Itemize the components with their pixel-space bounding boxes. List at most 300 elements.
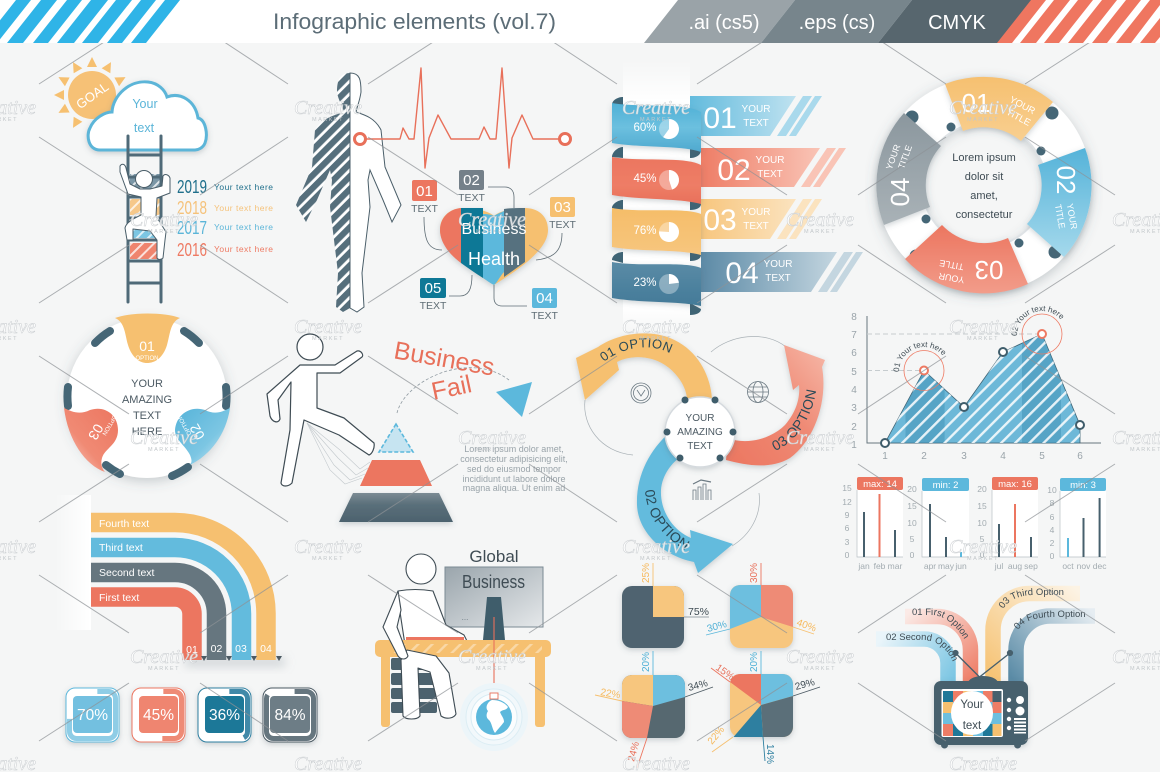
arrow 03: 03 OPTION xyxy=(772,390,816,450)
highlight circles xyxy=(904,314,1062,390)
tile 36% xyxy=(198,688,251,742)
panel: business health xyxy=(296,68,576,322)
format tabs: .eps (cs) xyxy=(799,12,875,34)
panel: line chart xyxy=(851,306,1101,462)
format tabs: .ai (cs5) xyxy=(688,12,760,34)
timeline years: 2017 xyxy=(177,218,207,238)
title: Infographic elements (vol.7) xyxy=(273,9,556,34)
tile 84%: 84% xyxy=(274,707,306,724)
pie five slices xyxy=(706,651,820,764)
figure upper xyxy=(398,554,469,645)
lorem text xyxy=(460,444,568,493)
watermark logos: MARKET xyxy=(640,117,672,123)
option 01: OPTION xyxy=(135,356,159,362)
band labels: Second text xyxy=(99,567,155,579)
pie 20/34/24/22: 22% xyxy=(599,687,621,701)
x axis labels: 5 xyxy=(1039,451,1045,462)
label 02 xyxy=(458,170,485,204)
label 03: 03 xyxy=(554,199,571,216)
chart q4: 2 xyxy=(1050,538,1055,548)
tv controls xyxy=(1007,696,1026,734)
watermark logos: MARKET xyxy=(804,229,836,235)
panel: rainbow bands xyxy=(55,495,285,666)
watermark logos: Creative xyxy=(949,536,1017,558)
pie five slices: 15% xyxy=(713,662,736,683)
heart chart xyxy=(440,208,548,285)
timeline years: 2016 xyxy=(177,240,207,260)
pie five slices: 14% xyxy=(764,744,775,764)
label 03: TEXT xyxy=(549,219,576,231)
connector arrows xyxy=(424,187,562,306)
antenna xyxy=(953,651,1012,677)
arrow 02 xyxy=(634,436,733,575)
watermark logos: Creative xyxy=(949,316,1017,338)
keyboard xyxy=(406,637,464,642)
option 03: 03 xyxy=(85,421,107,443)
pie 30/40/30: 30% xyxy=(749,563,760,583)
kicking figure xyxy=(267,334,374,486)
icon: globe with rings xyxy=(460,683,528,751)
watermark logos: MARKET xyxy=(967,336,999,342)
label 02: 02 xyxy=(463,172,480,189)
chart q1: feb xyxy=(874,561,886,571)
option labels: 03 Third Option xyxy=(998,588,1064,608)
chart q2: jun xyxy=(954,561,967,571)
segment 03 xyxy=(905,225,1028,293)
watermark logos: Creative xyxy=(294,97,362,119)
icon: badge xyxy=(631,383,651,403)
lorem text: incididunt ut labore dolore xyxy=(462,474,566,484)
segment 02: TITLE xyxy=(1053,204,1067,229)
pie 75/25: 25% xyxy=(641,563,652,583)
white column xyxy=(623,60,690,335)
tips xyxy=(201,656,282,661)
timeline years: Your text here xyxy=(214,182,273,192)
chart q2: 0 xyxy=(910,550,915,560)
arrow 03 xyxy=(724,345,826,470)
segment 01 xyxy=(945,77,1053,141)
watermark logos: Creative xyxy=(786,427,854,449)
segment 01: 01 xyxy=(962,88,990,118)
white disc xyxy=(67,318,227,478)
centre text: amet, xyxy=(970,190,998,202)
reference dashes xyxy=(867,334,1042,370)
tv body xyxy=(934,676,1028,748)
x axis labels: 1 xyxy=(882,451,888,462)
timeline years: Your text here xyxy=(214,203,273,213)
option labels: 01 First Option xyxy=(912,608,968,639)
chart q1: 9 xyxy=(845,510,850,520)
segment 03: 03 xyxy=(975,255,1003,285)
x axis labels: 4 xyxy=(1000,451,1006,462)
chart q3: aug xyxy=(1008,561,1022,571)
watermark logos: Creative xyxy=(949,97,1017,119)
pie 30/40/30 xyxy=(706,563,818,648)
red stripes xyxy=(997,0,1160,43)
pie 20/34/24/22 xyxy=(595,651,713,768)
arrow 01 xyxy=(574,333,714,402)
y axis labels: 4 xyxy=(851,385,857,396)
chart q3: 5 xyxy=(980,534,985,544)
centre text: YOUR xyxy=(131,378,163,390)
y axis labels: 8 xyxy=(851,312,857,323)
label 04 xyxy=(531,288,558,322)
curved labels: 02 Your text here xyxy=(1012,306,1064,336)
ribbon 76% xyxy=(612,200,701,261)
band numbers: 04 xyxy=(260,643,272,655)
watermark logos: MARKET xyxy=(148,447,180,453)
chart q4: 8 xyxy=(1050,498,1055,508)
chart q1 xyxy=(842,477,903,571)
chart q1: jan xyxy=(857,561,870,571)
pie 20/34/24/22: 24% xyxy=(626,740,642,763)
band numbers xyxy=(186,643,272,656)
chart q1: 0 xyxy=(845,550,850,560)
watermark logos: MARKET xyxy=(148,666,180,672)
dashed arc xyxy=(397,368,509,413)
format tabs: CMYK xyxy=(928,12,987,34)
watermark logos: MARKET xyxy=(640,336,672,342)
heading: Business xyxy=(392,336,497,382)
option 02: OPTION xyxy=(177,413,193,436)
heading xyxy=(392,336,497,406)
monitor: ... xyxy=(462,613,468,622)
watermark logos: MARKET xyxy=(967,117,999,123)
chart q3: 15 xyxy=(977,501,987,511)
floor shadow xyxy=(185,658,285,666)
bar 02 xyxy=(701,148,846,187)
watermark logos: Creative xyxy=(458,209,526,231)
watermark logos: Creative xyxy=(130,427,198,449)
icon: cloud: Your xyxy=(132,97,158,111)
option labels xyxy=(886,588,1085,662)
area xyxy=(885,334,1080,443)
ribbon 60% xyxy=(612,97,701,158)
chart q2: apr xyxy=(924,561,936,571)
bar 04: 04 xyxy=(725,257,759,290)
centre text xyxy=(952,152,1016,221)
chart q3: sep xyxy=(1024,561,1038,571)
y axis labels: 7 xyxy=(851,330,857,341)
icon: cloud: text xyxy=(134,121,155,135)
option 03: OPTION xyxy=(101,413,117,436)
watermark logos: MARKET xyxy=(640,556,672,562)
data points xyxy=(881,330,1084,447)
chart q1: 3 xyxy=(845,537,850,547)
segment 04: YOUR xyxy=(884,143,902,171)
bar 01: YOUR xyxy=(742,104,770,115)
bar 04: TEXT xyxy=(765,273,791,284)
curved labels: 01 Your text here xyxy=(894,342,946,372)
panel: television options xyxy=(876,586,1095,750)
ribbon 76%: 76% xyxy=(633,225,657,237)
heartbeat line xyxy=(354,68,570,168)
panel: spiral arrows xyxy=(574,333,826,575)
tile 70%: 70% xyxy=(77,707,108,724)
thin arcs xyxy=(585,336,786,546)
centre text: TEXT xyxy=(133,410,161,422)
band labels: Third text xyxy=(99,542,143,554)
blue triangle xyxy=(496,382,532,417)
panel: business fail xyxy=(267,334,568,522)
label 03 xyxy=(549,197,576,231)
tile 45%: 45% xyxy=(143,707,174,724)
band numbers: 03 xyxy=(235,643,247,655)
option labels: 04 Fourth Option xyxy=(1014,610,1085,629)
bar 04: YOUR xyxy=(764,259,792,270)
centre circle: YOUR xyxy=(686,413,714,424)
icon: cloud xyxy=(88,82,206,150)
label 04: 04 xyxy=(536,290,553,307)
chart q4: 0 xyxy=(1050,551,1055,561)
heart chart: Health xyxy=(468,249,520,269)
chart q4: nov xyxy=(1077,561,1091,571)
bar 01: 01 xyxy=(703,102,737,135)
pie 20/34/24/22: 20% xyxy=(641,652,652,672)
option 02 xyxy=(175,408,230,465)
bar 03: 03 xyxy=(703,204,737,237)
chart q2: may xyxy=(938,561,955,571)
dark knobs xyxy=(67,331,227,476)
label 01 xyxy=(411,180,438,215)
centre text xyxy=(122,378,172,438)
panel: percentage tiles xyxy=(66,688,317,742)
watermark logos: Creative xyxy=(622,536,690,558)
chart q4: oct xyxy=(1062,561,1074,571)
label 05: TEXT xyxy=(420,300,447,312)
heart chart: Business xyxy=(462,221,526,238)
curved labels xyxy=(894,306,1064,372)
icon: sun: GOAL xyxy=(73,79,111,112)
segment 03: YOUR xyxy=(937,271,965,285)
watermark logos: MARKET xyxy=(312,556,344,562)
bar 02: 02 xyxy=(717,154,751,187)
y axis labels: 5 xyxy=(851,367,857,378)
icon: sun xyxy=(54,57,128,130)
chart q2: 20 xyxy=(907,484,917,494)
panel: square pie charts xyxy=(595,563,820,768)
watermark logos: Creative xyxy=(786,646,854,668)
chart q3: 20 xyxy=(977,484,987,494)
option labels: 02 Second Option xyxy=(886,634,957,662)
chart q2 xyxy=(907,478,969,571)
bar 02: TEXT xyxy=(757,169,783,180)
watermark logos: MARKET xyxy=(476,666,508,672)
desk xyxy=(375,640,551,727)
timeline years: 2018 xyxy=(177,198,207,218)
x axis labels: 6 xyxy=(1077,451,1083,462)
blue stripes xyxy=(0,0,180,43)
heading: Global xyxy=(469,547,519,566)
y axis labels: 3 xyxy=(851,403,857,414)
ladder with coloured steps xyxy=(128,136,161,302)
chart q4: dec xyxy=(1093,561,1107,571)
chart q3: 10 xyxy=(977,518,987,528)
segment 04: TITLE xyxy=(896,144,914,170)
watermark logos: Creative xyxy=(458,646,526,668)
watermark logos: Creative xyxy=(294,536,362,558)
figure lower xyxy=(383,591,456,719)
watermark logos: Creative xyxy=(130,646,198,668)
pie five slices: 22% xyxy=(706,724,727,747)
icon: globe xyxy=(748,382,768,402)
bar 03: YOUR xyxy=(742,207,770,218)
panel: goal ladder xyxy=(54,57,273,302)
pie 30/40/30: 30% xyxy=(706,619,728,635)
chart q1: 6 xyxy=(845,523,850,533)
option 02: 02 xyxy=(186,421,208,443)
option bands xyxy=(876,594,1095,683)
watermark logos: Creative xyxy=(458,427,526,449)
chart q2: 5 xyxy=(910,534,915,544)
watermark logos: MARKET xyxy=(967,556,999,562)
chart q4 xyxy=(1047,478,1107,571)
arrow 01: 01 OPTION xyxy=(600,338,673,360)
label 04: TEXT xyxy=(531,310,558,322)
y axis labels: 6 xyxy=(851,348,857,359)
chart q2: 10 xyxy=(907,518,917,528)
arrow 02: 02 OPTION xyxy=(645,490,690,550)
chart q3: max: 16 xyxy=(998,479,1032,490)
watermark logos: MARKET xyxy=(804,666,836,672)
band labels: Fourth text xyxy=(99,518,149,530)
option 01: 01 xyxy=(139,338,155,354)
y axis labels: 1 xyxy=(851,440,857,451)
watermark logos: Creative xyxy=(130,209,198,231)
segment 01: TITLE xyxy=(1004,107,1032,129)
chart q4: min: 3 xyxy=(1070,480,1096,491)
segment 04: 04 xyxy=(885,178,915,206)
centre text: HERE xyxy=(132,426,162,438)
centre circle: AMAZING xyxy=(677,427,723,438)
pie 30/40/30: 40% xyxy=(795,617,818,635)
watermark logos: MARKET xyxy=(312,336,344,342)
dark knobs xyxy=(906,106,1062,262)
watermark logos: MARKET xyxy=(148,229,180,235)
ribbon 23% xyxy=(612,252,701,315)
bar 01: TEXT xyxy=(743,118,769,129)
ghost leg fan xyxy=(307,423,370,484)
climbing figure xyxy=(120,164,170,260)
lorem text: sed do eiusmod tempor xyxy=(467,464,561,474)
segment 02: YOUR xyxy=(1065,203,1079,231)
centre text: AMAZING xyxy=(122,394,172,406)
pie 75/25 xyxy=(622,563,709,648)
panel: ribbons xyxy=(612,60,863,335)
option 03 xyxy=(64,408,118,472)
segment 01: YOUR xyxy=(1007,94,1037,117)
bar 04 xyxy=(701,252,863,292)
ribbon 60%: 60% xyxy=(633,122,657,134)
chart q3: 0 xyxy=(980,550,985,560)
ribbon 45% xyxy=(612,147,701,210)
chart q4: 6 xyxy=(1050,512,1055,522)
timeline years xyxy=(177,177,273,260)
ribbon 23%: 23% xyxy=(633,277,657,289)
panel: ring xyxy=(876,77,1092,293)
option 01 xyxy=(115,314,180,363)
icon: growth chart xyxy=(693,480,711,500)
bar 03 xyxy=(701,199,822,239)
monitor xyxy=(445,567,543,640)
label 02: TEXT xyxy=(458,192,485,204)
watermark logos: Creative xyxy=(786,209,854,231)
axes xyxy=(867,316,1101,443)
segment 02 xyxy=(1027,148,1092,257)
watermark logos: Creative xyxy=(622,316,690,338)
stool xyxy=(391,658,437,713)
panel: global business desk xyxy=(375,547,551,751)
timeline years: 2019 xyxy=(177,177,207,197)
pie five slices: 20% xyxy=(749,652,760,672)
centre text: consectetur xyxy=(956,209,1013,221)
chart q1: 15 xyxy=(842,483,852,493)
y axis labels: 2 xyxy=(851,422,857,433)
chart q2: 15 xyxy=(907,501,917,511)
band labels xyxy=(99,518,155,604)
watermark logos: Creative xyxy=(622,97,690,119)
tile 84% xyxy=(263,688,317,742)
chart q1: max: 14 xyxy=(863,479,897,490)
watermark logos: MARKET xyxy=(804,447,836,453)
chart q3: jul xyxy=(994,561,1003,571)
white glow xyxy=(55,495,91,630)
lorem text: magna aliqua. Ut enim ad xyxy=(463,483,565,493)
segment 03: TITLE xyxy=(939,258,964,272)
bar 01 xyxy=(690,96,822,136)
centre circle: TEXT xyxy=(687,441,713,452)
lorem text: consectetur adipisicing elit, xyxy=(460,454,568,464)
x axis labels xyxy=(882,451,1083,462)
tile 45% xyxy=(132,688,185,742)
timeline years: Your text here xyxy=(214,222,273,232)
watermark logos: MARKET xyxy=(312,117,344,123)
tv screen: Your xyxy=(960,699,984,711)
chart q1: 12 xyxy=(842,497,852,507)
lorem text: Lorem ipsum dolor amet, xyxy=(464,444,564,454)
inner edge xyxy=(922,123,1046,247)
bar 03: TEXT xyxy=(743,221,769,232)
centre text: Lorem ipsum xyxy=(952,152,1016,164)
pie 20/34/24/22: 34% xyxy=(687,678,709,694)
panel: three option circle xyxy=(64,314,230,478)
segment 02: 02 xyxy=(1051,166,1081,194)
curved bands xyxy=(91,522,266,660)
heading: Fail xyxy=(429,370,474,406)
label 05 xyxy=(420,278,447,312)
tile 36%: 36% xyxy=(209,707,240,724)
x axis labels: 2 xyxy=(921,451,927,462)
y axis labels xyxy=(851,312,857,451)
pyramid xyxy=(339,424,453,522)
ribbon 45%: 45% xyxy=(633,173,657,185)
band numbers: 02 xyxy=(211,643,222,655)
cable xyxy=(493,617,495,693)
segment 04 xyxy=(876,113,941,225)
centre text: dolor sit xyxy=(965,171,1003,183)
tile 70% xyxy=(66,688,119,742)
pie 75/25: 75% xyxy=(688,606,709,618)
x axis labels: 3 xyxy=(961,451,967,462)
chart q3 xyxy=(977,477,1038,571)
timeline years: Your text here xyxy=(214,244,273,254)
watermark logos: MARKET xyxy=(476,229,508,235)
chart q4: 10 xyxy=(1047,485,1057,495)
format tabs xyxy=(644,0,1032,43)
human body xyxy=(296,73,401,312)
tv screen: text xyxy=(963,720,982,732)
watermark logos: MARKET xyxy=(476,447,508,453)
